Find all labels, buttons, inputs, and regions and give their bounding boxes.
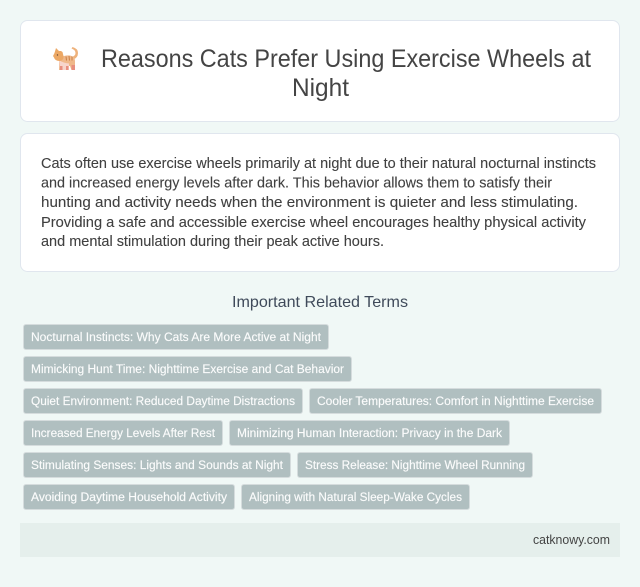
tag: Avoiding Daytime Household Activity xyxy=(31,490,228,504)
title xyxy=(101,45,591,102)
tag xyxy=(24,324,328,350)
text block: description xyxy=(41,156,596,250)
text block: description: Cats often use exercise wheels primarily at night due to their natural nocturnal instincts xyxy=(41,156,596,172)
icon: cat xyxy=(53,47,78,70)
footer xyxy=(20,523,620,557)
tag: Stress Release: Nighttime Wheel Running xyxy=(305,458,525,472)
text block: description: and increased energy levels after dark. This behavior allows them to satisfy their xyxy=(41,176,552,192)
tag: Aligning with Natural Sleep-Wake Cycles xyxy=(249,490,462,504)
panel: header xyxy=(20,20,620,122)
tag list xyxy=(24,324,602,510)
heading: related terms: Important Related Terms xyxy=(232,294,408,311)
tag: Stimulating Senses: Lights and Sounds at Night xyxy=(31,458,284,472)
tag xyxy=(24,420,222,446)
tag: Quiet Environment: Reduced Daytime Distractions xyxy=(31,394,295,408)
tag: Nocturnal Instincts: Why Cats Are More Active at Night xyxy=(31,330,322,344)
tag xyxy=(310,388,602,414)
tag xyxy=(230,420,510,446)
tag xyxy=(24,388,302,414)
tag: Increased Energy Levels After Rest xyxy=(31,426,216,440)
tag xyxy=(242,484,470,510)
title: Reasons Cats Prefer Using Exercise Wheels at xyxy=(101,45,591,73)
tag xyxy=(24,484,234,510)
title: Night xyxy=(292,74,349,102)
footer: catknowy.com xyxy=(533,533,610,547)
tag xyxy=(298,452,532,478)
tag xyxy=(24,356,352,382)
tag: Minimizing Human Interaction: Privacy in the Dark xyxy=(237,426,503,440)
tag: Mimicking Hunt Time: Nighttime Exercise and Cat Behavior xyxy=(31,362,344,376)
text block: description: Providing a safe and accessible exercise wheel encourages healthy physical activity xyxy=(41,215,587,231)
panel: description xyxy=(20,134,620,272)
tag xyxy=(24,452,290,478)
text block: description: hunting and activity needs when the environment is quieter and less stimulating. xyxy=(41,195,578,211)
tag: Cooler Temperatures: Comfort in Nighttime Exercise xyxy=(317,394,594,408)
text block: description: and mental stimulation during their peak active hours. xyxy=(41,234,384,250)
